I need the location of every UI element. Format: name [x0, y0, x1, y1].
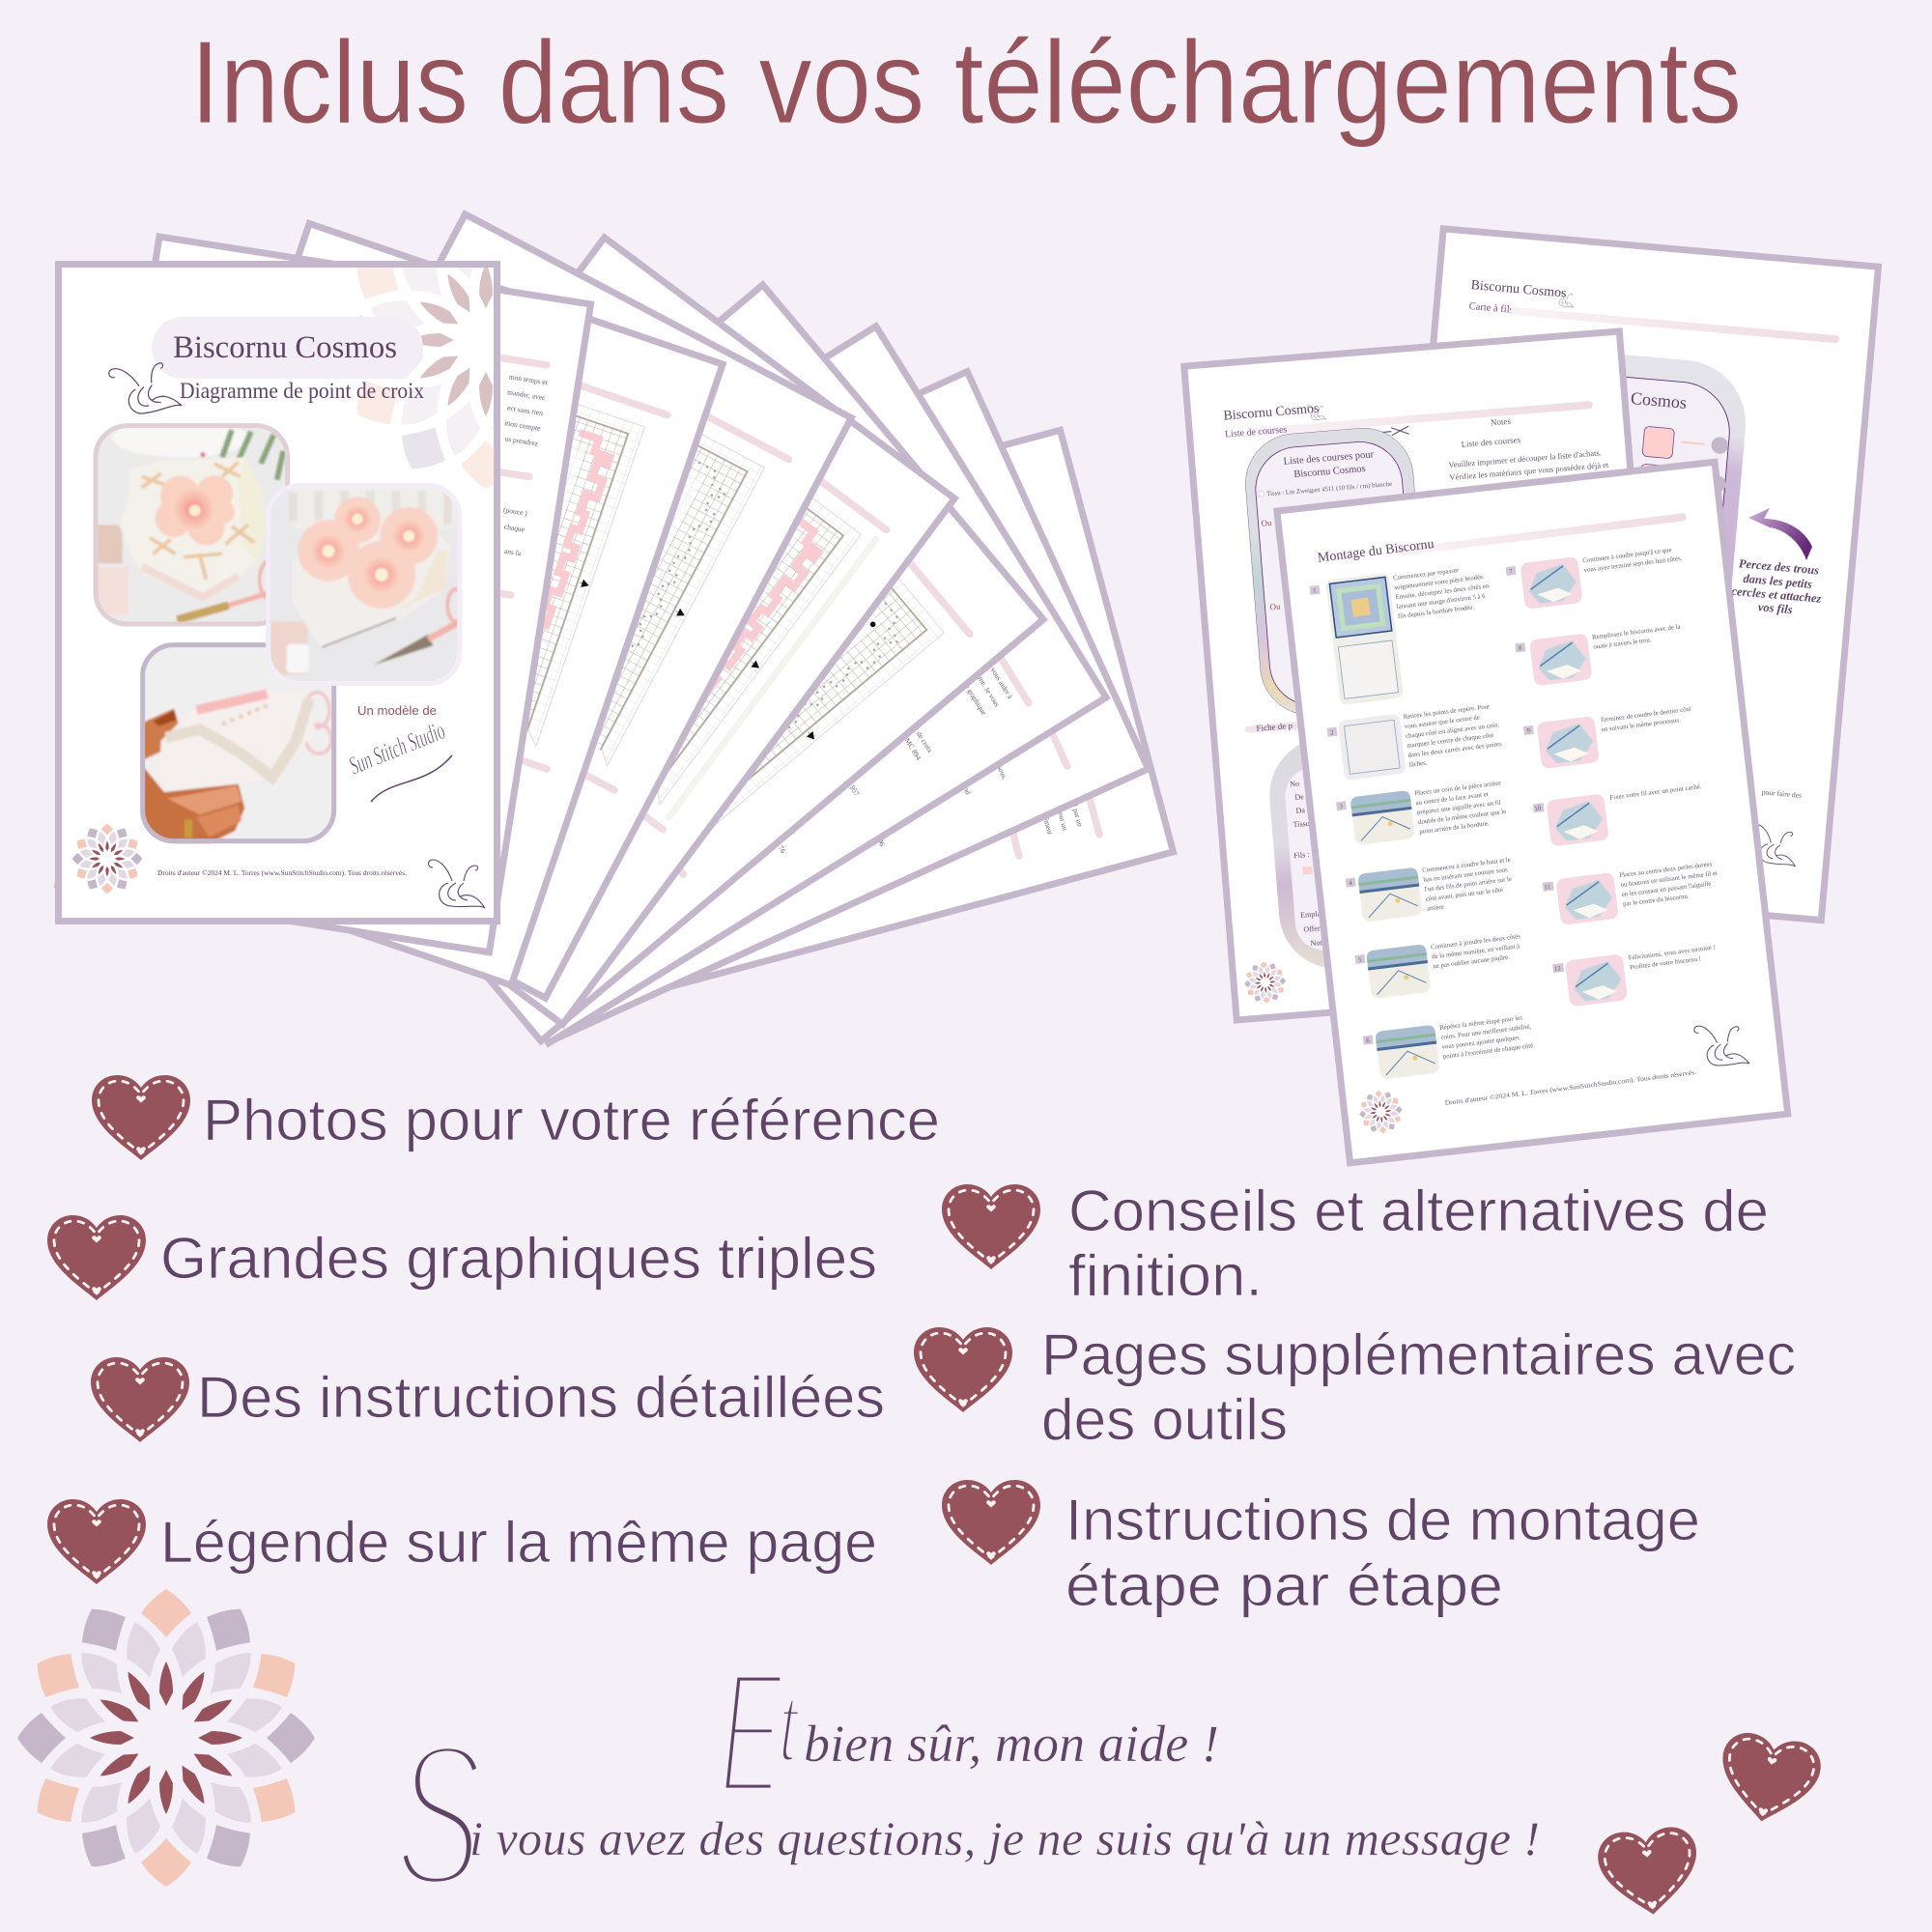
step 3: préparez une aiguille avec un fil: [1417, 800, 1501, 816]
decorative heart right: [1713, 1729, 1825, 1830]
step 6: 6: [1366, 1037, 1371, 1044]
step 4: arrière.: [1427, 903, 1446, 913]
script line 1: bien sûr, mon aide !: [804, 1715, 1219, 1773]
step 11: par le centre du biscornu.: [1623, 893, 1690, 908]
step 2: vous assurer que le centre de: [1405, 715, 1480, 730]
shopping list card: Tissu : Lin Zweigart 4511 (10 fils / cm) blanche: [1266, 481, 1392, 497]
step 9: 9: [1526, 727, 1531, 735]
step 2: [1326, 701, 1504, 781]
designer credit: Sun Stitch Studio: [345, 716, 449, 781]
text fragment: pour faire des: [1762, 787, 1802, 800]
photo 2: biscornu with four flowers: [266, 483, 464, 686]
notes column: Veuillez imprimer et découper la liste d'achats.: [1448, 447, 1602, 469]
shopping list card: Ou: [1269, 601, 1281, 611]
handwritten note: [1730, 556, 1825, 619]
step 4: Commencez à coudre le haut et le: [1422, 857, 1511, 874]
step 8: ouate à travers le trou.: [1593, 637, 1652, 651]
large mandala: [17, 1589, 315, 1887]
page 6: ur vous aider à: [984, 659, 1015, 700]
step 12: Profitez de votre biscornu !: [1630, 955, 1701, 971]
feature: montage: Instructions de montage: [1065, 1488, 1700, 1552]
page 6: nt de croix: [911, 724, 935, 754]
cover copyright: Droits d'auteur ©2024 M. L. Torres (www.SunStitchStudio.com). Tous droits réservés.: [157, 868, 407, 877]
faded mandala on cover: [357, 268, 495, 489]
middle page mandala: [1242, 960, 1288, 1005]
page 6: C 957: [844, 778, 862, 798]
step 7: 7: [1509, 568, 1514, 576]
script line 2: [395, 1700, 1540, 1929]
feature: grandes graphiques: [47, 1215, 877, 1300]
step 2: lâches.: [1408, 759, 1428, 769]
three cover photos, drawn in a 3x working space: [94, 418, 464, 843]
back page heading: [1468, 278, 1842, 344]
step 5: 5: [1358, 956, 1363, 964]
cover title pill: [152, 317, 423, 379]
step 12: Félicitations, vous avez terminé !: [1629, 945, 1716, 962]
page 1: text page: us prendrez: [504, 434, 539, 448]
purple arrow: [1748, 508, 1812, 560]
feature: conseils: [942, 1179, 1769, 1308]
step 5: Continuez à joindre les deux côtés: [1431, 933, 1521, 951]
feature: conseils: Conseils et alternatives de: [1068, 1179, 1769, 1243]
notes column: [1445, 409, 1609, 482]
page 8: urément: [1040, 810, 1055, 837]
back page heading: Carte à fils: [1468, 301, 1514, 316]
step 1: Ensuite, découpez les deux côtés en: [1395, 582, 1490, 601]
pattern sheet card: Offert: [1303, 923, 1323, 934]
fanned stack of chart pages: [58, 214, 1174, 1043]
step 8: [1515, 622, 1686, 688]
front page: montage du biscornu: [1291, 506, 1756, 1136]
notes column: Notes: [1491, 416, 1512, 427]
front page frame: [1277, 462, 1788, 1163]
step 6: vous pouvez ajouter quelques: [1441, 1035, 1520, 1051]
step 4: 4: [1349, 880, 1353, 887]
step 11: [1542, 860, 1721, 927]
feature: pages supplémentaires: [914, 1322, 1796, 1452]
photo 1: biscornu with flower: [94, 418, 290, 626]
step 7: vous ayez terminé sept des huit côtés.: [1583, 555, 1683, 574]
feature: conseils: finition.: [1068, 1243, 1263, 1308]
decorative heart bottom: [1596, 1825, 1702, 1919]
front page ornament: [1693, 1020, 1749, 1069]
handwritten note: vos fils: [1757, 600, 1793, 616]
script line 1: [720, 1634, 1219, 1831]
step 2: chaque côté est aligné avec un coin,: [1406, 722, 1500, 740]
designer credit: [345, 703, 452, 802]
middle page heading: [1223, 380, 1593, 440]
step 2: dans les deux carrés avec des points: [1407, 741, 1502, 759]
thread card: [1495, 346, 1751, 722]
step 10: 10: [1534, 805, 1542, 812]
page 2: chart with pink stair band: [98, 223, 723, 985]
step 8: Remplissez le biscornu avec de la: [1592, 624, 1681, 641]
page 8: [427, 430, 1174, 1022]
page 3: chart with grey circles: [159, 214, 851, 998]
step 2: marquez le centre de chaque côté: [1406, 732, 1494, 750]
pattern sheet card: Notes: [1310, 938, 1329, 948]
pattern sheet label: [1244, 719, 1313, 734]
pattern sheet card: [1265, 730, 1429, 973]
shopping list card: Ou: [1261, 518, 1272, 528]
page 7: [370, 372, 1149, 1041]
step 9: Terminez de coudre le dernier côté: [1600, 706, 1691, 724]
photo 3: biscornu held in hand: [140, 642, 336, 843]
step 4: bas en insérant une couture sous: [1423, 867, 1508, 884]
feature: photos: [92, 1075, 940, 1160]
step 4: l'un des fils de point arrière sur le: [1424, 876, 1512, 894]
step 7: Continuez à coudre jusqu'à ce que: [1582, 547, 1672, 564]
step 2: 2: [1330, 729, 1335, 736]
step 3: [1336, 779, 1508, 847]
step 1: laissant une marge d'environ 5 à 6: [1396, 593, 1487, 611]
feature: pages supplémentaires: des outils: [1041, 1387, 1288, 1452]
step 12: [1552, 943, 1720, 1009]
step 6: Répétez la même étape pour les: [1439, 1014, 1523, 1032]
step 5: [1354, 932, 1526, 1001]
middle page heading: Biscornu Cosmos: [1223, 402, 1320, 424]
step 5: ne pas oublier aucune piqûre.: [1433, 954, 1510, 970]
step 6: [1362, 1012, 1537, 1081]
back page ornament: [1750, 824, 1799, 867]
page 1: text page: ans la: [503, 547, 523, 557]
step 8: 8: [1519, 645, 1522, 652]
thread card: Cosmos: [1630, 388, 1688, 412]
pattern sheet card: De: [1294, 792, 1305, 802]
page 7: nd: [962, 785, 973, 796]
pattern sheet card: Fils :: [1293, 850, 1310, 860]
cover subtitle: Diagramme de point de croix: [180, 379, 424, 404]
step 4: côté avant, puis un sur le côté: [1426, 887, 1503, 903]
step 9: [1523, 704, 1696, 771]
middle page heading: Liste de courses: [1225, 424, 1288, 440]
step 1: fils depuis la bordure brodée.: [1398, 604, 1475, 620]
feature: photos: Photos pour votre référence: [203, 1088, 940, 1152]
page 6: [319, 327, 1106, 1043]
script line 2: i vous avez des questions, je ne suis qu'à un message !: [469, 1811, 1540, 1865]
step 6: coins. Pour une meilleure stabilité,: [1440, 1023, 1532, 1041]
step 9: en suivant le même processus.: [1601, 717, 1682, 733]
pattern sheet card: Da: [1295, 806, 1306, 815]
script line 2: S: [395, 1700, 483, 1929]
notes column: Vérifiez les matériaux que vous possédez déjà et: [1449, 460, 1609, 482]
front page mandala: [1357, 1088, 1405, 1136]
page 1: text page: (pouce ): [503, 505, 528, 518]
page 1: text page: ect sans rien: [507, 403, 544, 417]
step 12: 12: [1553, 965, 1562, 973]
step 11: Placez au centre deux perles dorées: [1619, 861, 1713, 879]
page 1: text page: chaque: [503, 522, 526, 534]
page 4: chart with pink stair band: [213, 238, 954, 1024]
script line 1: t: [779, 1675, 800, 1782]
feature: pages supplémentaires: Pages supplémentaires avec: [1041, 1322, 1796, 1387]
middle page: liste de courses: [1184, 331, 1672, 1020]
step 6: points à l'extrémité de chaque côté.: [1443, 1042, 1536, 1061]
page 1: text page: mander, avec: [507, 387, 547, 402]
shopping list card: Liste des courses pour: [1283, 449, 1375, 468]
page 6: DMC 894: [900, 732, 923, 762]
page 8: s pour un: [1054, 803, 1069, 832]
notes column: Liste des courses: [1461, 435, 1521, 449]
handwritten note: dans les petits: [1743, 572, 1813, 591]
step 11: en les cousant en passant l'aiguille: [1621, 881, 1712, 898]
shopping list card: [1241, 424, 1432, 719]
step 1: Commencez par repasser: [1393, 567, 1460, 582]
page 6: le graphique: [962, 681, 989, 717]
page 8: tral par un: [1068, 796, 1085, 828]
scissors dashed line: [1360, 426, 1409, 438]
step 7: [1505, 544, 1687, 611]
feature: montage: étape par étape: [1065, 1553, 1503, 1618]
front page heading: [1317, 506, 1687, 566]
step 11: ou boutons en utilisant le même fil et: [1620, 870, 1718, 889]
pattern sheet card: No: [1290, 780, 1299, 788]
script line 1: E: [720, 1634, 783, 1831]
cover corner ornament: [429, 860, 485, 908]
cover flourish: [108, 355, 182, 421]
front page heading: Montage du Biscornu: [1317, 537, 1435, 566]
step 1: 1: [1313, 587, 1317, 595]
cover small mandala: [72, 824, 142, 894]
pattern sheet card: Tissu: [1293, 819, 1310, 829]
handwritten note: cercles et attachez: [1731, 584, 1822, 606]
page 7: ssous.: [994, 761, 1009, 781]
step 3: point arrière de la bordure.: [1419, 820, 1490, 836]
page 7: 06: [876, 838, 887, 848]
cover title pill: Biscornu Cosmos: [173, 330, 397, 365]
feature: légende: [47, 1499, 877, 1584]
step 1: [1309, 560, 1502, 707]
step 2: Retirez les points de repère. Pour: [1403, 703, 1492, 721]
feature: grandes graphiques: Grandes graphiques triples: [160, 1226, 877, 1291]
step 11: 11: [1544, 884, 1550, 892]
feature: instructions: [91, 1357, 885, 1442]
page 6: 76: [777, 844, 787, 855]
pattern sheet label: Fiche de p: [1256, 721, 1293, 733]
feature: instructions: Des instructions détaillées: [197, 1365, 885, 1430]
step 5: de la même manière, en veillant à: [1432, 943, 1520, 960]
back page: carte à fils: [1386, 229, 1878, 921]
step 3: double de la même couleur que le: [1418, 809, 1507, 826]
title: Inclus dans vos téléchargements: [190, 16, 1742, 148]
step 4: [1345, 856, 1516, 923]
step 10: Fixez votre fil avec un point caché.: [1609, 783, 1702, 802]
feature: montage: [942, 1480, 1700, 1618]
designer credit: Un modèle de: [357, 703, 437, 718]
handwritten note: Percez des trous: [1738, 556, 1820, 578]
step 1: soigneusement votre pièce brodée.: [1394, 574, 1485, 591]
page 1: text page: mon temps et: [508, 372, 549, 387]
feature: légende: Légende sur la même page: [160, 1510, 877, 1575]
front page copyright: Droits d'auteur ©2024 M. L. Torres (www.SunStitchStudio.com). Tous droits réservés.: [1444, 1069, 1697, 1107]
page 6: terme. Je vous: [972, 668, 1002, 708]
page 5: chart with circles: [260, 285, 1043, 1041]
cover page: [55, 261, 500, 924]
pattern sheet card: Emplac: [1300, 909, 1324, 920]
step 10: [1533, 781, 1707, 848]
shopping list card: Biscornu Cosmos: [1293, 464, 1366, 480]
step 3: au centre de la face avant et: [1415, 791, 1489, 807]
step 3: Placez un coin de la pièce arrière: [1414, 780, 1501, 797]
page 1: text page: [58, 237, 590, 952]
back page heading: Biscornu Cosmos: [1470, 278, 1567, 301]
page 1: text page: ition compte: [504, 418, 542, 433]
step 3: 3: [1339, 803, 1344, 810]
